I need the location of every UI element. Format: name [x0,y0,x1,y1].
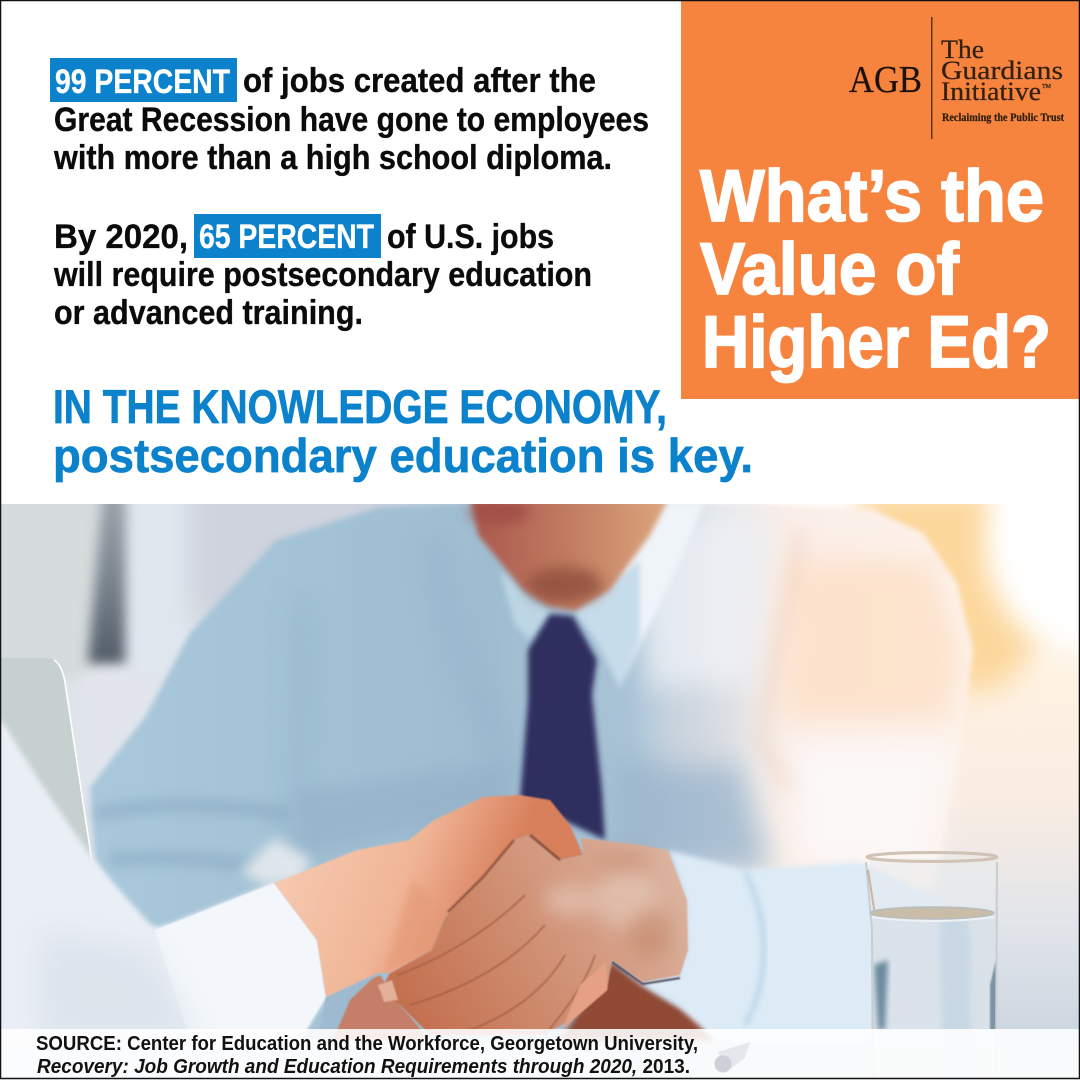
upper shirt highlight [634,520,746,696]
photo: handshake across a desk [1,504,1079,1072]
logo: AGB The Guardians Initiative: TM [1042,84,1052,90]
highlight: 65 percent [194,214,381,258]
arm beneath the handshake [318,962,715,1040]
blue headline: postsecondary education is key. [53,429,753,482]
panel: orange title block [681,1,1079,399]
title: Value of [700,229,960,310]
logo: AGB The Guardians Initiative: Guardians [941,56,1063,85]
stat 2: 65 percent of jobs [53,214,592,332]
fingers [397,895,595,1035]
water glass [865,851,998,1029]
title [700,156,1051,383]
man's cuff and forearm [612,850,945,1040]
other person's hand [274,795,583,997]
stat 2: 65 percent of jobs: or advanced training. [54,294,363,332]
logo: AGB The Guardians Initiative: The [941,35,984,64]
stat 1: 99 percent of jobs: of jobs created after the [243,62,596,100]
chin and neck [470,500,668,611]
stat 2: 65 percent of jobs: By 2020, [54,218,188,256]
shirt creases [290,540,510,880]
second person's white sleeve [0,718,326,1040]
source note: Recovery: Job Growth and Education Requirements through 2020, 2013. [37,1056,690,1078]
stat 2: 65 percent of jobs: will require postsecondary education [53,256,592,294]
white fold of shirt beside the cuff [240,838,312,885]
necktie [520,614,605,840]
source band [0,1029,1080,1080]
man's hand [378,835,688,1035]
logo: AGB The Guardians Initiative [849,17,1064,139]
source note: SOURCE: Center for Education and the Workforce, Georgetown University, [36,1033,698,1055]
stat 2: 65 percent of jobs: 65 PERCENT [199,218,374,256]
logo: AGB The Guardians Initiative: AGB [849,59,922,101]
stat 1: 99 percent of jobs [50,58,649,177]
title: Higher Ed? [702,302,1051,383]
collar [500,500,705,688]
sleeve glow [780,560,960,720]
stat 2: 65 percent of jobs: of U.S. jobs [387,218,554,256]
source note [36,1033,698,1078]
warm light flare behind the shoulder [840,504,1079,706]
title: What’s the [700,156,1044,237]
blue headline: IN THE KNOWLEDGE ECONOMY, [53,380,667,433]
blue headline [53,380,753,482]
pen on desk [714,1042,750,1072]
stat 1: 99 percent of jobs: 99 PERCENT [55,63,230,101]
logo: AGB The Guardians Initiative: Initiative [941,77,1041,106]
seated man's shirt [90,502,973,1040]
highlight: 99 percent [50,58,237,102]
photo backdrop [1,504,1079,1029]
stat 1: 99 percent of jobs: with more than a high school diploma. [53,139,612,177]
laptop at left [0,658,94,870]
stat 1: 99 percent of jobs: Great Recession have gone to employees [54,101,649,139]
